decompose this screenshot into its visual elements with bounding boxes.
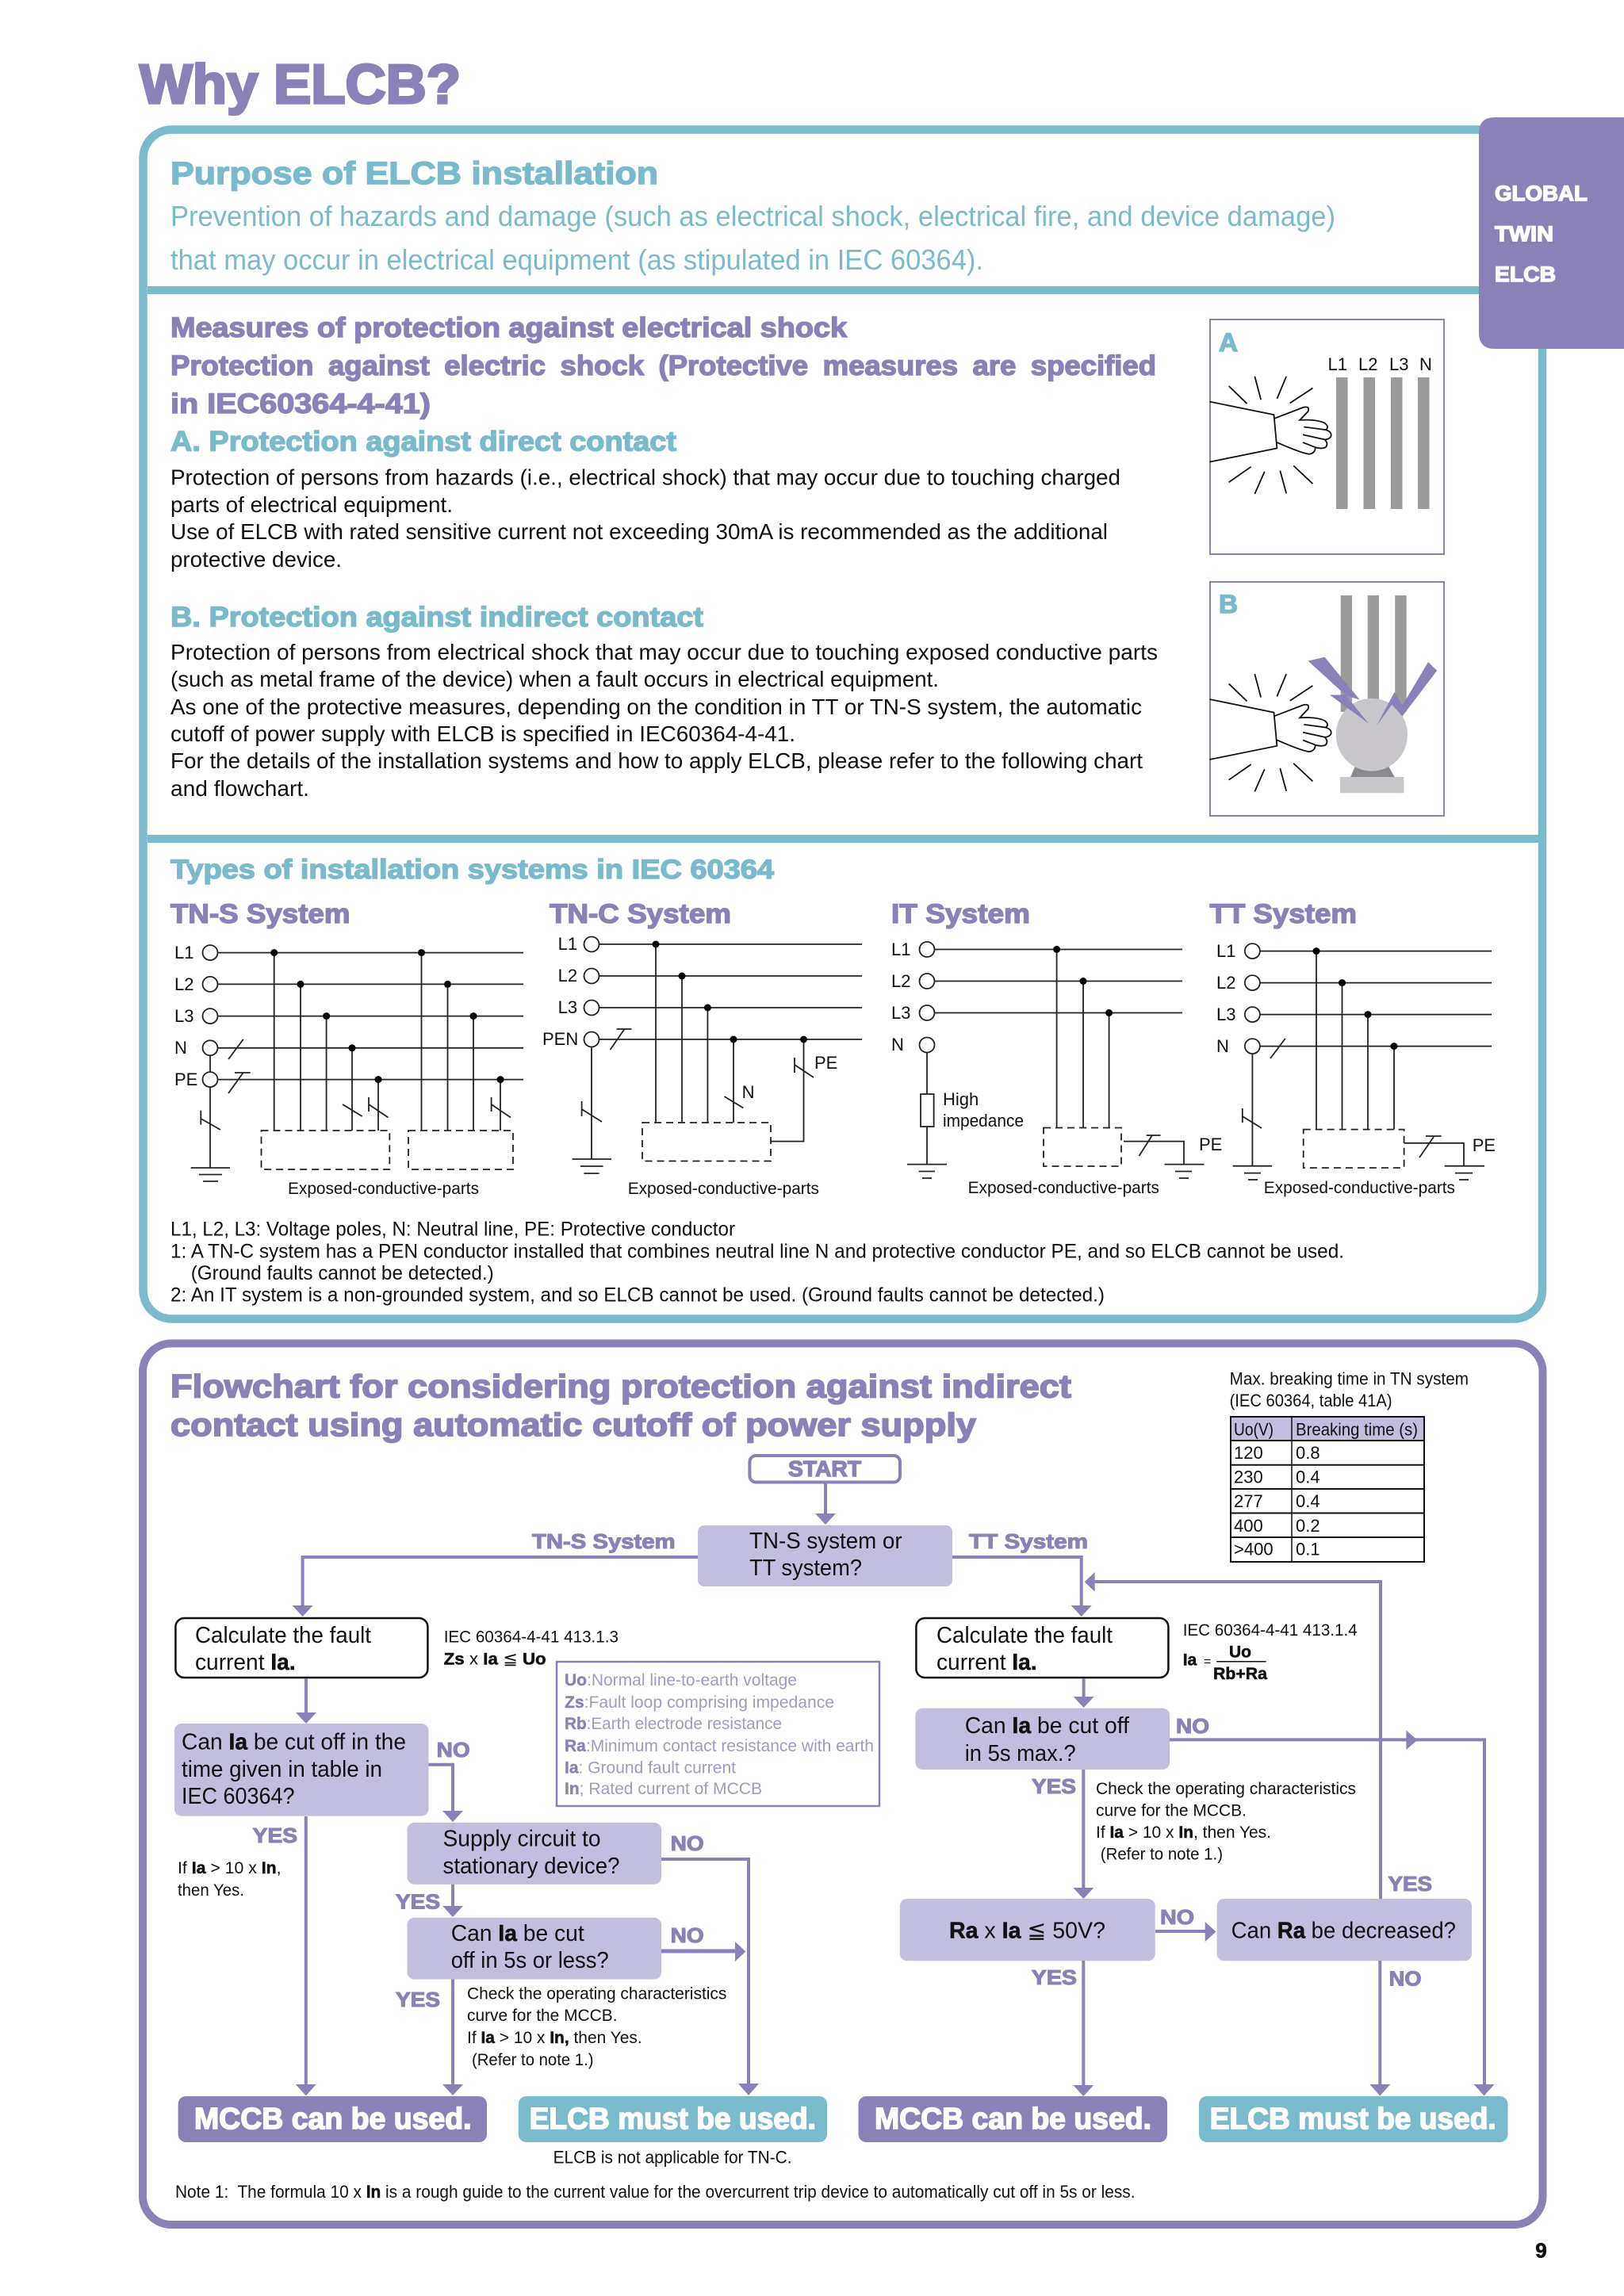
arrow: start to system decision (815, 1483, 836, 1525)
note: check characteristics TT: Check the operating characteristics (1096, 1780, 1356, 1798)
section: measures of protection (170, 312, 1444, 816)
arrow: NO to ELCB (1170, 1730, 1495, 2096)
illustration A: hand near bare conductors: N (1419, 354, 1432, 374)
table: max breaking time: Max. breaking time in TN system (1230, 1369, 1469, 1389)
side tab: Global Twin ELCB: GLOBAL (1495, 182, 1588, 205)
diagram: TN-S system: Exposed-conductive-parts (288, 1180, 479, 1198)
table: max breaking time: 0.8 (1296, 1443, 1320, 1463)
table: max breaking time: 230 (1234, 1468, 1263, 1487)
node: table time decision: IEC 60364? (182, 1784, 295, 1809)
outcome: ELCB must be used (TT) (1199, 2096, 1508, 2142)
formula: TT: Rb+Ra (1213, 1665, 1267, 1683)
illustration B: hand touching faulty device: B (1219, 590, 1238, 618)
formula: TN-S (444, 1628, 619, 1668)
diagram: IT system (891, 939, 1222, 1197)
diagram: IT system: L2 (891, 971, 910, 991)
formula: TN-S: IEC 60364-4-41 413.1.3 (444, 1628, 619, 1646)
label: YES: YES (396, 1890, 440, 1914)
heading: flowchart title (170, 1368, 1071, 1443)
node: supply circuit decision (408, 1823, 661, 1885)
node: calculate fault current TN-S: Calculate the fault (195, 1623, 371, 1648)
text: purpose description (170, 200, 1335, 276)
legend: symbols (557, 1662, 879, 1806)
diagram: TT system (1216, 941, 1496, 1197)
arrow: calculate to cut-off decision (296, 1678, 316, 1724)
node: table time decision: time given in table in (182, 1757, 382, 1782)
node: 5s decision: Can Ia be cut (451, 1921, 584, 1946)
node: Ra x Ia decision: Ra x Ia ≦ 50V? (949, 1919, 1105, 1944)
diagram: TN-S system: L2 (174, 974, 193, 994)
notes: installation system legend: 2: An IT system is a non-grounded system, and so ELCB cannot be used. (Ground faults cannot be detected.) (170, 1284, 1105, 1307)
note: check characteristics TT (1096, 1780, 1356, 1864)
heading: A direct contact: A. Protection against direct contact (170, 427, 676, 457)
arrow: YES to 5s decision (442, 1885, 463, 1917)
note: if Ia greater than 10 x In (178, 1859, 282, 1900)
table: max breaking time: Uo(V) (1234, 1419, 1274, 1440)
table: max breaking time: >400 (1234, 1540, 1274, 1559)
label: NO: NO (1389, 1967, 1421, 1991)
note: ELCB not applicable for TN-C: ELCB is not applicable for TN-C. (553, 2147, 791, 2167)
heading: flowchart title: contact using automatic cutoff of power supply (170, 1406, 976, 1443)
diagram: TT system: N (1216, 1036, 1229, 1056)
node: system decision (698, 1525, 952, 1586)
note: check characteristics TN-S: Check the operating characteristics (467, 1985, 726, 2003)
diagram: TN-S system: PE (174, 1070, 197, 1089)
text: indirect contact body: As one of the protective measures, depending on the condition in TT or TN-S system, the automatic (170, 695, 1142, 719)
node: decrease Ra decision: Can Ra be decreased? (1231, 1919, 1456, 1944)
illustration A: hand near bare conductors: L3 (1389, 354, 1408, 374)
branch label: TT: TT System (969, 1529, 1088, 1553)
note 1: Note 1: The formula 10 x In is a rough guide to the current value for the overcurrent trip device to automatically cut off in 5s or less. (175, 2182, 1136, 2202)
arrow: NO to ELCB line (661, 1942, 745, 1961)
legend: symbols: In; Rated current of MCCB (565, 1780, 762, 1798)
label: NO: NO (437, 1738, 470, 1762)
arrow: calculate to 5s max decision (1074, 1678, 1094, 1708)
table: max breaking time (1230, 1369, 1469, 1562)
diagram: TN-C system: PE (814, 1053, 837, 1073)
panel: flowchart (143, 1343, 1543, 2225)
formula: TT: Ia (1183, 1651, 1197, 1670)
text: direct contact body: Use of ELCB with rated sensitive current not exceeding 30mA is recommended as the additional (170, 519, 1108, 544)
text: purpose description: Prevention of hazards and damage (such as electrical shock, electrical fire, and device damage) (170, 200, 1335, 232)
diagram: TN-S system: N (174, 1038, 187, 1058)
illustration A: hand near bare conductors: L1 (1327, 354, 1347, 374)
heading: TT: TT System (1210, 899, 1357, 929)
branch label: TN-S: TN-S System (532, 1529, 676, 1553)
label: YES: YES (1388, 1872, 1432, 1896)
arrow: to TT calculation (952, 1557, 1092, 1617)
label: YES: YES (1032, 1774, 1076, 1798)
table: max breaking time: 277 (1234, 1491, 1263, 1511)
label: YES: YES (396, 1988, 440, 2011)
note: check characteristics TN-S: If Ia > 10 x In, then Yes. (467, 2029, 642, 2047)
label: YES: YES (253, 1823, 297, 1847)
text: indirect contact body: (such as metal frame of the device) when a fault occurs in electrical equipment. (170, 667, 939, 691)
diagram: TN-C system (542, 934, 862, 1198)
table: max breaking time: 0.2 (1296, 1516, 1320, 1536)
arrow: NO to decrease Ra (1155, 1922, 1216, 1942)
outcome: MCCB can be used (TT) (858, 2096, 1167, 2142)
node: start: START (788, 1456, 861, 1481)
diagram: TN-C system: L3 (558, 997, 577, 1017)
table: max breaking time: 0.4 (1296, 1468, 1320, 1487)
text: direct contact body: protective device. (170, 547, 342, 572)
node: supply circuit decision: stationary device? (442, 1854, 620, 1879)
notes: installation system legend (170, 1219, 1344, 1307)
outcome: MCCB can be used (TN-S) (178, 2096, 487, 2142)
diagram: TT system: L3 (1216, 1004, 1235, 1024)
illustration A: hand near bare conductors (1210, 320, 1444, 554)
heading: B indirect contact: B. Protection against indirect contact (170, 602, 703, 633)
note: check characteristics TT: If Ia > 10 x In, then Yes. (1096, 1823, 1271, 1842)
side tab: Global Twin ELCB: TWIN (1495, 222, 1553, 246)
diagram: IT system: L1 (891, 939, 910, 959)
label: NO: NO (1160, 1905, 1194, 1929)
arrow: YES to Ra decision (1073, 1770, 1094, 1899)
notes: installation system legend: (Ground faults cannot be detected.) (191, 1262, 494, 1284)
side tab: Global Twin ELCB: ELCB (1495, 262, 1556, 286)
illustration B: hand touching faulty device (1210, 582, 1444, 816)
node: Ra x Ia decision (900, 1899, 1155, 1961)
node: decrease Ra decision (1217, 1899, 1472, 1961)
legend: symbols: Uo:Normal line-to-earth voltage (565, 1671, 797, 1689)
diagram: TN-C system: L1 (558, 934, 577, 954)
table: max breaking time: (IEC 60364, table 41A) (1230, 1391, 1392, 1410)
table: max breaking time: 120 (1234, 1443, 1263, 1463)
diagram: TN-S system: L3 (174, 1006, 193, 1026)
text: indirect contact body (170, 640, 1158, 801)
note: check characteristics TN-S: curve for the MCCB. (467, 2007, 617, 2025)
diagram: TN-C system: N (742, 1082, 754, 1102)
formula: TT: Uo (1229, 1644, 1251, 1662)
text: indirect contact body: and flowchart. (170, 776, 309, 801)
diagram: TT system: Exposed-conductive-parts (1264, 1179, 1455, 1197)
node: 5s max decision: Can Ia be cut off (965, 1713, 1130, 1739)
legend: symbols: Zs:Fault loop comprising impedance (565, 1693, 834, 1712)
diagram: TN-C system: L2 (558, 966, 577, 985)
note: check characteristics TT: (Refer to note 1.) (1101, 1846, 1223, 1864)
heading: IT: IT System (891, 899, 1030, 929)
heading: measures of protection: Protection against electric shock (Protective measures are specified (170, 350, 1156, 381)
note: check characteristics TN-S (467, 1985, 726, 2069)
heading: measures of protection (170, 312, 1156, 419)
arrow: YES to MCCB (1073, 1961, 1094, 2096)
node: 5s decision: off in 5s or less? (451, 1948, 609, 1973)
table: max breaking time: 400 (1234, 1516, 1263, 1536)
heading: TN-C: TN-C System (550, 899, 731, 929)
heading: flowchart title: Flowchart for considering protection against indirect (170, 1368, 1071, 1405)
node: calculate fault current TT (916, 1618, 1168, 1678)
label: NO: NO (1176, 1714, 1209, 1738)
arrow: NO to ELCB (661, 1859, 759, 2095)
table: max breaking time: 0.4 (1296, 1491, 1320, 1511)
diagram: IT system: L3 (891, 1003, 910, 1023)
text: indirect contact body: Protection of persons from electrical shock that may occur due to touching exposed conductive parts (170, 640, 1158, 664)
section: types of installation systems (170, 855, 1496, 1307)
notes: installation system legend: 1: A TN-C system has a PEN conductor installed that combines neutral line N and protective conductor PE, and so ELCB cannot be used. (170, 1241, 1344, 1263)
arrow: YES to MCCB (296, 1816, 316, 2095)
illustration A: hand near bare conductors: L2 (1358, 354, 1377, 374)
node: system decision: TN-S system or (749, 1529, 902, 1554)
side tab: Global Twin ELCB (1479, 117, 1624, 349)
note: check characteristics TT: curve for the MCCB. (1096, 1801, 1247, 1820)
node: supply circuit decision: Supply circuit to (442, 1827, 601, 1852)
arrow: YES returns to calculation (1085, 1572, 1381, 1899)
diagram: TN-C system: Exposed-conductive-parts (628, 1180, 819, 1198)
notes: installation system legend: L1, L2, L3: Voltage poles, N: Neutral line, PE: Protective conductor (170, 1219, 735, 1241)
node: calculate fault current TN-S: current Ia. (195, 1650, 296, 1675)
arrow: NO to supply circuit (428, 1765, 463, 1822)
diagram: TN-S system (174, 943, 523, 1198)
legend: symbols: Rb:Earth electrode resistance (565, 1715, 782, 1733)
section: purpose of ELCB installation (170, 156, 1335, 276)
diagram: IT system: Exposed-conductive-parts (968, 1179, 1159, 1197)
arrow: to TN-S calculation (293, 1557, 698, 1617)
panel: teal frame with purpose, protection measures and installation systems (143, 130, 1542, 1319)
node: calculate fault current TN-S (175, 1618, 427, 1678)
diagram: TN-C system: PEN (542, 1029, 578, 1049)
diagram: IT system: High (943, 1089, 979, 1109)
formula: TT: = (1204, 1655, 1211, 1669)
table: max breaking time: 0.1 (1296, 1540, 1320, 1559)
note: if Ia greater than 10 x In: then Yes. (178, 1881, 244, 1900)
diagram: TN-S system: L1 (174, 943, 193, 962)
text: direct contact body: Protection of persons from hazards (i.e., electrical shock) that may occur due to touching charged (170, 465, 1120, 490)
outcome: MCCB can be used (TT): MCCB can be used. (875, 2103, 1151, 2136)
note: if Ia greater than 10 x In: If Ia > 10 x In, (178, 1859, 282, 1877)
node: calculate fault current TT: current Ia. (936, 1650, 1037, 1675)
outcome: ELCB must be used (TN-S): ELCB must be used. (530, 2103, 816, 2136)
legend: symbols: Ia: Ground fault current (565, 1758, 736, 1777)
heading: TN-S: TN-S System (170, 899, 350, 929)
diagram: IT system: N (891, 1035, 904, 1054)
outcome: MCCB can be used (TN-S): MCCB can be used. (194, 2103, 471, 2136)
node: 5s decision (408, 1918, 661, 1979)
text: purpose description: that may occur in electrical equipment (as stipulated in IEC 60364). (170, 243, 983, 276)
outcome: ELCB must be used (TN-S) (519, 2096, 827, 2142)
label: YES: YES (1032, 1965, 1077, 1989)
label: NO: NO (671, 1831, 704, 1855)
diagram: IT system: PE (1199, 1135, 1222, 1154)
diagram: TT system: L2 (1216, 973, 1235, 993)
node: calculate fault current TT: Calculate the fault (936, 1623, 1113, 1648)
legend: symbols: Ra:Minimum contact resistance with earth (565, 1737, 874, 1755)
diagram: TT system: PE (1473, 1135, 1496, 1155)
outcome: ELCB must be used (TT): ELCB must be used. (1210, 2103, 1496, 2136)
node: table time decision (174, 1724, 428, 1816)
node: start (749, 1456, 900, 1483)
arrow: NO to ELCB (1369, 1961, 1390, 2096)
diagram: IT system: impedance (943, 1111, 1024, 1131)
text: direct contact body (170, 465, 1120, 572)
arrow: YES to MCCB (442, 1979, 463, 2095)
node: table time decision: Can Ia be cut off in the (182, 1730, 406, 1755)
node: 5s max decision (915, 1709, 1170, 1770)
diagram: TT system: L1 (1216, 941, 1235, 961)
heading: measures of protection: in IEC60364-4-41) (170, 388, 431, 419)
text: indirect contact body: cutoff of power supply with ELCB is specified in IEC60364-4-41. (170, 721, 795, 746)
text: direct contact body: parts of electrical equipment. (170, 492, 453, 517)
illustration A: hand near bare conductors: A (1219, 328, 1238, 357)
note: check characteristics TN-S: (Refer to note 1.) (472, 2051, 593, 2069)
node: 5s max decision: in 5s max.? (965, 1741, 1076, 1766)
page number: 9 (1535, 2239, 1547, 2263)
formula: TT (1183, 1621, 1358, 1683)
label: NO: NO (671, 1923, 704, 1947)
node: system decision: TT system? (749, 1556, 862, 1581)
formula: TT: IEC 60364-4-41 413.1.4 (1183, 1621, 1358, 1640)
heading: types of installation systems: Types of installation systems in IEC 60364 (170, 855, 774, 885)
text: indirect contact body: For the details of the installation systems and how to apply ELCB, please refer to the following chart (170, 748, 1143, 773)
table: max breaking time: Breaking time (s) (1296, 1419, 1418, 1440)
heading: purpose: Purpose of ELCB installation (170, 156, 658, 191)
heading: measures of protection: Measures of protection against electrical shock (170, 312, 848, 343)
formula: TN-S: Zs x Ia ≦ Uo (444, 1651, 546, 1668)
title: Why ELCB? (140, 53, 461, 115)
